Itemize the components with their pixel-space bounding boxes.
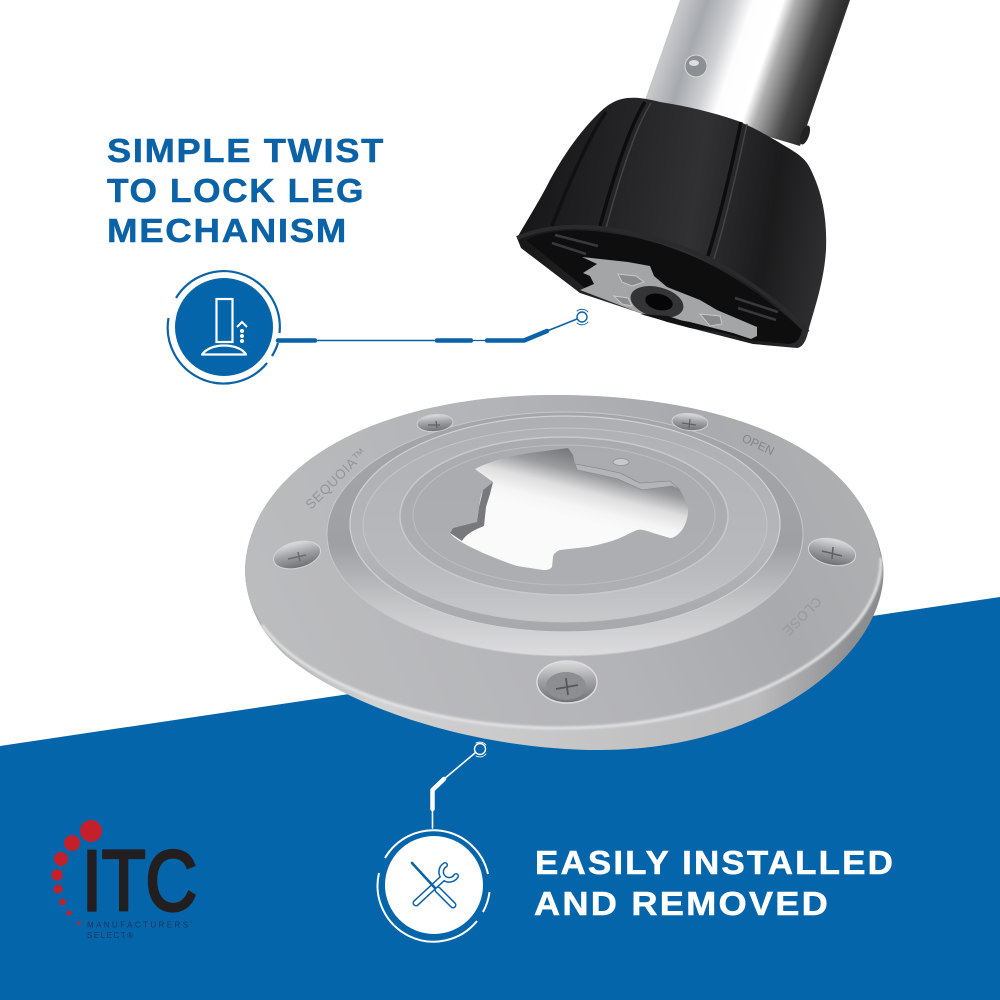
heading: easily installed and removed: EASILY INSTALLED <box>535 844 895 881</box>
leg tube <box>645 0 850 146</box>
small stud behind foot <box>798 124 812 146</box>
tube pin <box>685 55 707 77</box>
screw top left <box>416 413 454 433</box>
rim edge highlight <box>262 558 881 728</box>
badge disc <box>175 278 273 376</box>
logo: ITC Manufacturers' Select <box>51 820 197 940</box>
screw bottom <box>537 661 597 703</box>
embossed text: OPEN: OPEN <box>740 431 776 458</box>
raised ring middle band <box>363 428 767 622</box>
screw right <box>806 534 858 570</box>
mounting plate <box>245 395 883 750</box>
plate tabs <box>614 274 722 326</box>
slot below hub <box>640 314 716 332</box>
inner ring fine line <box>413 445 715 585</box>
plate centre hub <box>627 281 687 323</box>
icon: lift leg badge <box>168 271 280 384</box>
foot rib highlights <box>606 103 747 259</box>
target ring at foot <box>577 312 587 322</box>
plate rim <box>245 395 883 750</box>
wrench <box>416 865 456 903</box>
screwdriver <box>412 863 453 905</box>
underside ribs <box>552 235 778 320</box>
top callout leader line <box>278 309 588 340</box>
badge outer broken ring <box>378 830 490 942</box>
heading: easily installed and removed <box>534 844 895 922</box>
up arrow glyph <box>237 322 247 342</box>
icon: tools badge <box>378 830 490 942</box>
plate face <box>245 395 881 728</box>
lip of foot <box>517 227 808 332</box>
bottom callout leader line <box>432 742 486 828</box>
logo subtitle: MANUFACTURERS' <box>87 920 192 930</box>
badge disc <box>385 836 483 934</box>
badge outer broken ring <box>168 271 280 384</box>
base glyph <box>202 346 246 354</box>
grey lock plate <box>580 257 757 339</box>
embossed text: CLOSE: CLOSE <box>780 594 824 638</box>
blue diagonal background band <box>0 597 1000 1000</box>
logo red dots <box>51 820 102 925</box>
logo subtitle: SELECT® <box>87 931 133 940</box>
raised ring outer band <box>327 412 803 656</box>
foot ribs <box>552 102 741 256</box>
keyhole wall left notch <box>450 482 493 541</box>
heading: simple twist to lock leg mechanism: MECHANISM <box>107 212 348 249</box>
raised ring second band <box>350 416 780 632</box>
table leg with locking foot <box>517 0 850 348</box>
target ring at plate <box>474 744 486 754</box>
black foot body <box>517 98 826 348</box>
heading: easily installed and removed: AND REMOVED <box>534 885 830 922</box>
logo wordmark: ITC <box>82 834 197 929</box>
logo subtitle <box>87 920 192 940</box>
underside opening <box>526 230 802 344</box>
heading: simple twist to lock leg mechanism: SIMPLE TWIST <box>107 132 385 169</box>
plate centre hole <box>643 291 675 313</box>
screw left <box>271 537 323 573</box>
keyhole opening <box>450 448 688 570</box>
screw top right <box>671 412 709 432</box>
small detent <box>613 458 629 466</box>
leg glyph <box>216 299 232 342</box>
heading: simple twist to lock leg mechanism: TO LOCK LEG <box>107 172 365 209</box>
embossed text: SEQUOIA: SEQUOIA™ <box>303 445 370 512</box>
inner plate <box>400 437 728 595</box>
heading: simple twist to lock leg mechanism <box>107 132 385 249</box>
keyhole tab band <box>575 464 680 490</box>
